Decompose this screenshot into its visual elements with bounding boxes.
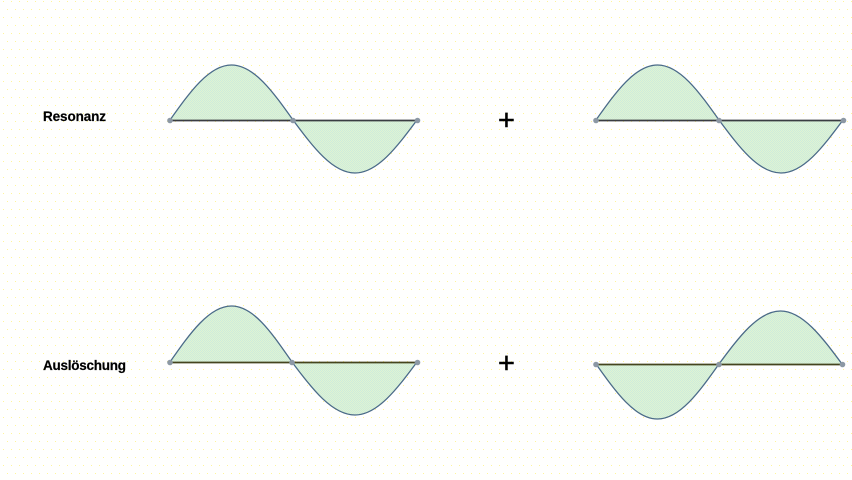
label: Auslöschung: Auslöschung — [43, 358, 126, 373]
label: Resonanz: Resonanz — [43, 109, 106, 124]
wave: Auslöschung left — [167, 306, 420, 415]
wave: Resonanz left — [167, 65, 420, 173]
plus sign: Auslöschung: + — [498, 348, 515, 380]
wave: Auslöschung right — [593, 311, 845, 419]
wave: Resonanz right — [593, 65, 846, 173]
plus sign: Resonanz: + — [498, 104, 515, 136]
